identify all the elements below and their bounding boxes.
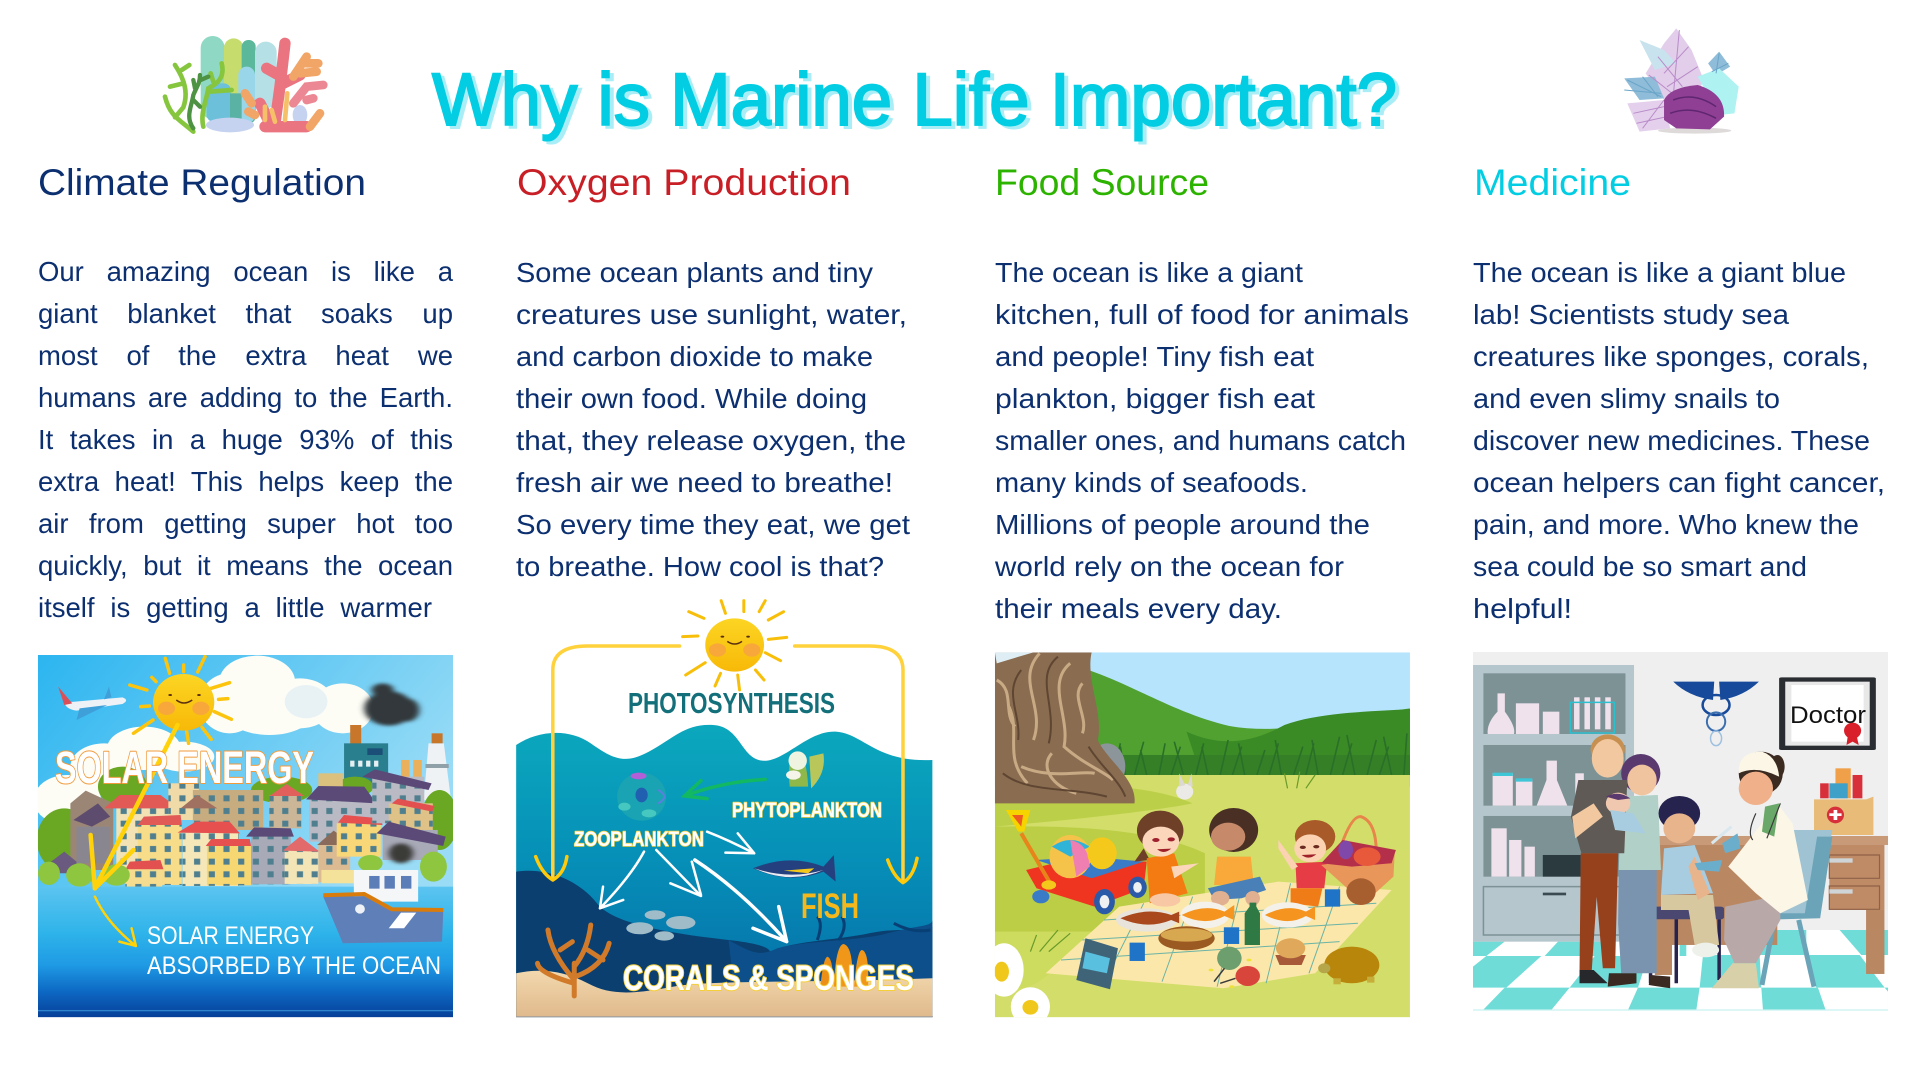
text: oxygen production body: to breathe. How cool is that? bbox=[516, 551, 884, 582]
caduceus bbox=[1673, 682, 1759, 746]
medicine box bbox=[1814, 797, 1873, 835]
text: climate regulation body bbox=[38, 256, 454, 623]
seabed hills bbox=[516, 871, 932, 1017]
label: fish: FISH bbox=[801, 887, 859, 926]
wagon bbox=[1026, 857, 1147, 907]
checkered floor bbox=[1473, 930, 1888, 1010]
smoke bbox=[364, 683, 419, 726]
text: medicine body: sea could be so smart and bbox=[1473, 551, 1807, 582]
tree bbox=[995, 652, 1135, 803]
heading: Oxygen Production: Oxygen Production bbox=[517, 162, 851, 203]
bushes bbox=[37, 767, 458, 872]
text: climate regulation body: air from getting super hot too bbox=[38, 508, 453, 539]
baby bbox=[1606, 793, 1646, 833]
nurse bbox=[1695, 752, 1808, 988]
zooplankton icon bbox=[617, 773, 666, 821]
text: oxygen production body: creatures use sunlight, water, bbox=[516, 299, 907, 330]
text: food source body: world rely on the ocean for bbox=[994, 551, 1344, 582]
text: oxygen production body: So every time they eat, we get bbox=[516, 509, 910, 540]
text: oxygen production body: Some ocean plants and tiny bbox=[516, 257, 873, 288]
phytoplankton icon bbox=[789, 765, 808, 787]
small fish bbox=[626, 910, 695, 941]
text: food source body: their meals every day. bbox=[995, 593, 1282, 624]
text: oxygen production body: and carbon dioxide to make bbox=[516, 341, 873, 372]
man bbox=[1571, 734, 1627, 983]
boy bbox=[1659, 796, 1719, 957]
title: Why is Marine Life Important? bbox=[432, 58, 1397, 141]
seaweed bbox=[817, 917, 931, 940]
text: food source body: and people! Tiny fish eat bbox=[995, 341, 1314, 372]
sponges bbox=[834, 944, 852, 987]
bread bbox=[1275, 955, 1306, 965]
heading: Medicine: Medicine bbox=[1474, 162, 1631, 203]
wall bbox=[1473, 652, 1888, 1010]
text: medicine body: The ocean is like a giant blue bbox=[1473, 257, 1846, 288]
sand bbox=[516, 971, 932, 1017]
text: climate regulation body: Our amazing ocean is like a bbox=[38, 256, 453, 287]
text: oxygen production body: their own food. While doing bbox=[516, 383, 867, 414]
sun bbox=[130, 657, 231, 743]
label: doctor certificate: Doctor bbox=[1790, 702, 1866, 729]
salad bowl bbox=[1158, 926, 1215, 950]
sea bbox=[38, 887, 453, 1017]
sky bbox=[38, 655, 453, 895]
chair bbox=[1756, 830, 1832, 917]
text: climate regulation body: extra heat! This helps keep the bbox=[38, 466, 453, 497]
text: food source body: Millions of people around the bbox=[995, 509, 1370, 540]
blanket bbox=[1046, 882, 1392, 988]
kid 3 bbox=[1278, 820, 1335, 907]
heading: Food Source: Food Source bbox=[995, 162, 1209, 203]
text: climate regulation body: giant blanket that soaks up bbox=[38, 298, 453, 329]
woman bbox=[1608, 754, 1670, 988]
tuna bbox=[753, 855, 836, 882]
text: medicine body: and even slimy snails to bbox=[1473, 383, 1780, 414]
boat bbox=[354, 870, 418, 902]
label: solar energy: SOLAR ENERGY bbox=[55, 742, 314, 793]
label: absorbed by ocean bbox=[147, 922, 441, 980]
rock bbox=[1100, 743, 1126, 775]
glasses bbox=[1130, 889, 1340, 961]
book bbox=[1076, 938, 1118, 989]
label: photosynthesis: PHOTOSYNTHESIS bbox=[628, 688, 835, 720]
panel: solar energy illustration bbox=[34, 655, 458, 1017]
text: oxygen production body: fresh air we need to breathe! bbox=[516, 467, 893, 498]
basket bbox=[1321, 817, 1396, 903]
hills bbox=[1090, 670, 1410, 755]
kid 1 bbox=[1134, 811, 1199, 907]
fish plates bbox=[1116, 902, 1315, 932]
text: food source body bbox=[994, 257, 1409, 624]
yellow cycle arrows bbox=[536, 646, 917, 883]
text: climate regulation body: humans are adding to the Earth. bbox=[38, 382, 453, 413]
label: corals and sponges: CORALS & SPONGES bbox=[623, 959, 914, 998]
green arrow bbox=[684, 779, 765, 799]
text: climate regulation body: It takes in a huge 93% of this bbox=[38, 424, 453, 455]
tall grass bbox=[1107, 755, 1410, 776]
stool bbox=[1644, 907, 1724, 919]
turtle bbox=[1324, 947, 1379, 983]
sun bbox=[683, 601, 787, 690]
text: climate regulation body: most of the extra heat we bbox=[38, 340, 453, 371]
label: zooplankton: ZOOPLANKTON bbox=[574, 828, 704, 851]
teddy bbox=[1346, 878, 1376, 905]
lighthouse bbox=[424, 743, 450, 800]
text: medicine body: lab! Scientists study sea bbox=[1473, 299, 1789, 330]
houses bbox=[49, 769, 446, 887]
text: medicine body: pain, and more. Who knew the bbox=[1473, 509, 1859, 540]
daisies bbox=[984, 943, 1050, 1026]
coral orange bbox=[538, 925, 609, 996]
text: food source body: The ocean is like a giant bbox=[995, 257, 1303, 288]
foreground grass bbox=[1030, 772, 1315, 952]
text: medicine body: creatures like sponges, corals, bbox=[1473, 341, 1869, 372]
text: oxygen production body bbox=[516, 257, 910, 582]
heading: Climate Regulation: Climate Regulation bbox=[38, 162, 366, 203]
text: medicine body bbox=[1473, 257, 1885, 624]
factory bbox=[350, 725, 361, 745]
text: food source body: kitchen, full of food for animals bbox=[995, 299, 1409, 330]
rackets bbox=[1217, 947, 1242, 970]
desk bbox=[1651, 836, 1888, 845]
text: food source body: smaller ones, and humans catch bbox=[995, 425, 1406, 456]
text: oxygen production body: that, they release oxygen, the bbox=[516, 425, 906, 456]
text: climate regulation body: quickly, but it means the ocean bbox=[38, 550, 453, 581]
label: absorbed by ocean: SOLAR ENERGY bbox=[147, 922, 314, 950]
panel: medicine clinic illustration bbox=[1473, 652, 1888, 1010]
text: food source body: plankton, bigger fish eat bbox=[995, 383, 1315, 414]
text: food source body: many kinds of seafoods. bbox=[995, 467, 1308, 498]
meadow bbox=[995, 775, 1410, 1017]
kid 2 bbox=[1208, 808, 1266, 906]
icon: purple coral right bbox=[1624, 28, 1739, 134]
diploma bbox=[1779, 677, 1876, 750]
ocean bbox=[516, 725, 932, 1017]
shelving unit bbox=[1473, 665, 1634, 942]
icon: watercolor coral left bbox=[165, 36, 323, 132]
panel: food source picnic illustration bbox=[984, 652, 1410, 1026]
white arrows bbox=[600, 832, 787, 942]
label: absorbed by ocean: ABSORBED BY THE OCEAN bbox=[147, 952, 441, 980]
label: phytoplankton: PHYTOPLANKTON bbox=[732, 799, 882, 822]
text: climate regulation body: itself is getting a little warmer bbox=[38, 592, 432, 623]
plane bbox=[64, 697, 126, 711]
lab glassware bbox=[1488, 693, 1584, 877]
bottle bbox=[1245, 903, 1260, 945]
clouds bbox=[34, 656, 373, 825]
panel: photosynthesis illustration bbox=[516, 601, 933, 1017]
trees bbox=[38, 852, 447, 887]
text: medicine body: ocean helpers can fight cancer, bbox=[1473, 467, 1885, 498]
solar arrows bbox=[91, 725, 178, 946]
text: medicine body: discover new medicines. These bbox=[1473, 425, 1870, 456]
text: medicine body: helpful! bbox=[1473, 593, 1572, 624]
rabbit bbox=[1176, 784, 1193, 800]
